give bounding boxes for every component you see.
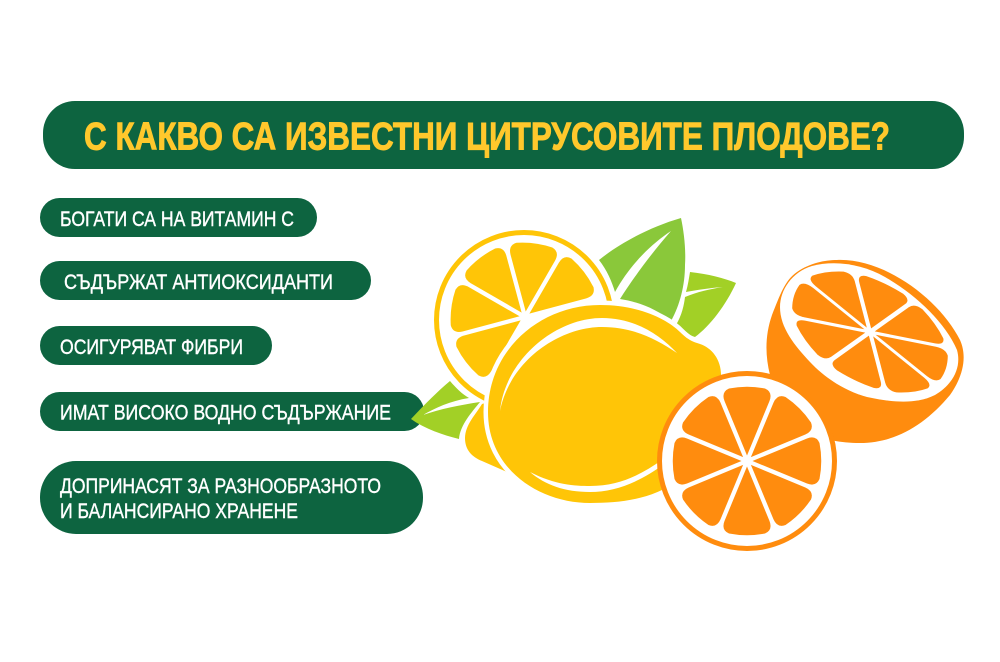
- callout: vitamin C: БОГАТИ СА НА ВИТАМИН С: [60, 207, 294, 231]
- callout: water content: ИМАТ ВИСОКО ВОДНО СЪДЪРЖАНИЕ: [60, 400, 391, 424]
- title: [43, 101, 964, 169]
- callout: vitamin C: [40, 198, 317, 237]
- callout: antioxidants: СЪДЪРЖАТ АНТИОКСИДАНТИ: [64, 270, 333, 294]
- icon: small left leaf: [411, 381, 480, 439]
- icon: halved orange: [766, 247, 964, 443]
- icon: lemon slice: [436, 232, 612, 408]
- callout: fibre: [40, 326, 272, 365]
- callout: balanced diet: И БАЛАНСИРАНО ХРАНЕНЕ: [60, 499, 298, 523]
- callout: balanced diet: ДОПРИНАСЯТ ЗА РАЗНООБРАЗНОТО: [60, 474, 381, 498]
- icon: large green leaf: [599, 218, 685, 321]
- callout: balanced diet: [40, 461, 423, 534]
- illustration: citrus fruits: [411, 218, 964, 548]
- callout: antioxidants: [40, 261, 371, 300]
- icon: orange slice: [660, 374, 834, 548]
- icon: lemon: [465, 305, 721, 503]
- icon: small right leaf: [676, 272, 736, 337]
- callout: water content: [40, 392, 424, 431]
- callout: fibre: ОСИГУРЯВАТ ФИБРИ: [60, 335, 243, 359]
